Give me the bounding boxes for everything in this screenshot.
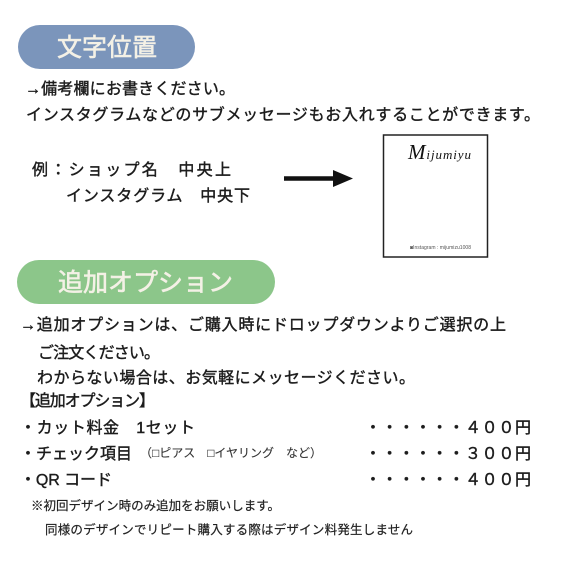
text block: option instructions: ご注文ください。 [38, 344, 160, 362]
logo: Mijumiyu script: Mijumiyu [407, 140, 472, 164]
caption: instagram handle: ◙Instagram : mijumizu1008 [410, 245, 471, 251]
subheading: 追加オプション list: 【追加オプション】 [20, 392, 155, 410]
price row: QR code: ・QR コード [20, 472, 112, 489]
note: design fee: ※初回デザイン時のみ追加をお願いします。 [31, 498, 280, 513]
arrow: example to preview [284, 170, 353, 187]
price row: cut fee [20, 419, 531, 437]
heading: 追加オプション pill: 追加オプション [58, 269, 233, 297]
text block: position instructions [25, 80, 540, 124]
text block: example positions: 例：ショップ名 中央上 [32, 161, 231, 179]
price row: check item: ・・・・・・３００円 [365, 446, 531, 463]
price row: cut fee: ・・・・・・４００円 [365, 420, 531, 437]
heading: 文字位置 pill [18, 25, 195, 69]
text block: example positions [32, 161, 250, 205]
text block: option instructions [20, 316, 506, 387]
price row: check item: （□ピアス □イヤリング など） [140, 446, 322, 460]
panel: card preview [384, 135, 488, 257]
text block: option instructions: わからない場合は、お気軽にメッセージください。 [37, 369, 415, 387]
text block: option instructions: →追加オプションは、ご購入時にドロップダウンよりご選択の上 [20, 316, 506, 334]
price row: cut fee: ・カット料金 1セット [20, 419, 195, 437]
price row: QR code: ・・・・・・４００円 [365, 472, 531, 489]
price row: QR code [20, 472, 531, 489]
price row: check item: ・チェック項目 [20, 445, 132, 463]
heading: 追加オプション pill [17, 260, 275, 304]
note: design fee [31, 498, 413, 537]
text block: position instructions: →備考欄にお書きください。 [25, 80, 235, 98]
note: design fee: 同様のデザインでリピート購入する際はデザイン料発生しません [45, 522, 413, 537]
text block: position instructions: インスタグラムなどのサブメッセージもお入れすることができます。 [26, 105, 540, 124]
heading: 文字位置 pill: 文字位置 [57, 34, 157, 62]
text block: example positions: インスタグラム 中央下 [66, 187, 250, 205]
price row: check item [20, 445, 531, 463]
